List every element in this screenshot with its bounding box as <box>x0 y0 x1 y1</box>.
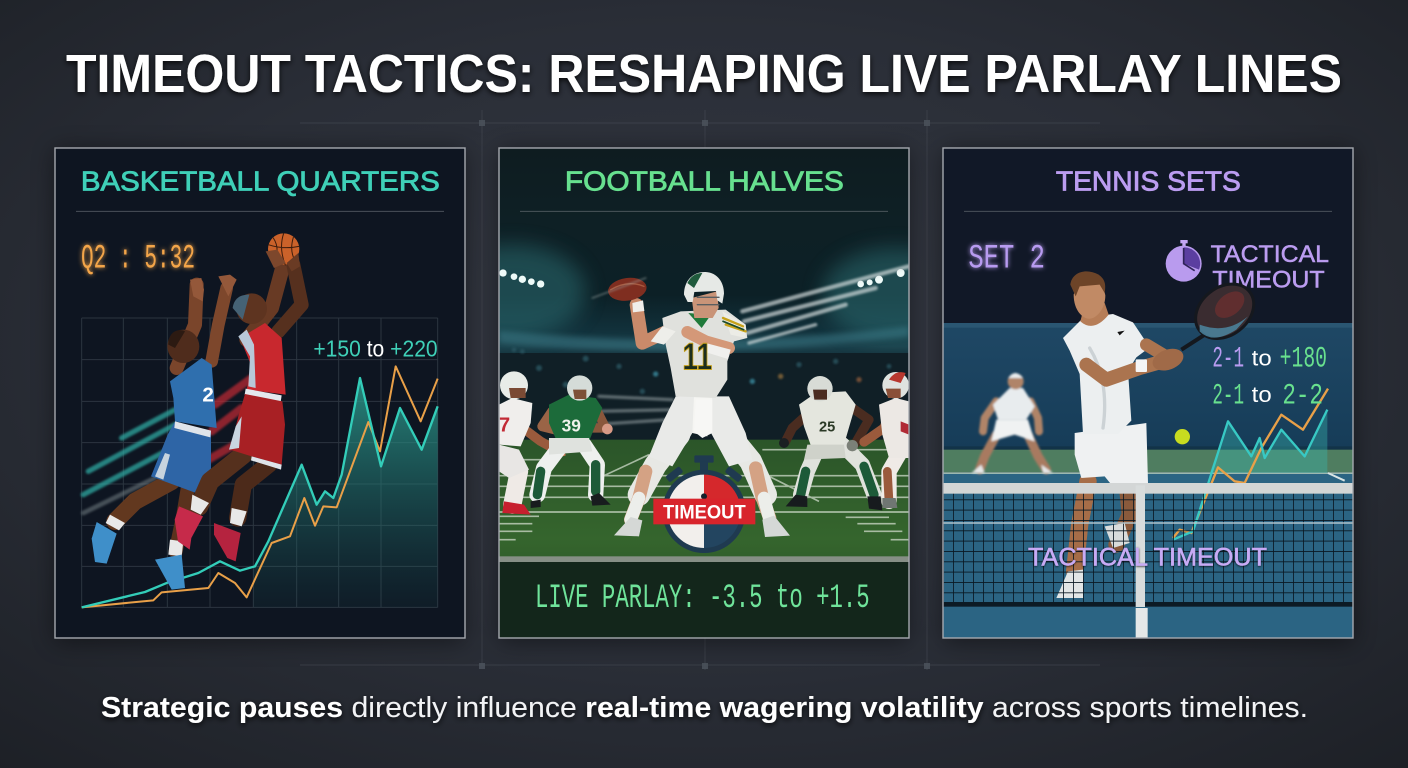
player: green jersey <box>531 375 613 508</box>
panel border: tennis <box>943 148 1353 638</box>
player: left lineman red trim <box>499 371 566 515</box>
player: left lineman red trim: 7 <box>499 414 510 436</box>
tennis net <box>943 483 1353 638</box>
panel border: football <box>499 148 909 638</box>
panel: football halves <box>499 148 908 638</box>
player: quarterback <box>592 272 790 537</box>
set score odds: to <box>1252 382 1272 407</box>
basketball player: red jersey <box>175 233 302 561</box>
main tennis player <box>1056 271 1186 598</box>
set score odds: 2-1 <box>1212 380 1244 414</box>
football field <box>499 440 909 638</box>
panel heading: basketball quarters: BASKETBALL QUARTERS <box>81 166 440 197</box>
player: far right red helmet <box>864 372 909 508</box>
tactical timeout callout <box>1211 241 1329 293</box>
tennis racket <box>1181 273 1264 350</box>
panel: tennis sets <box>944 148 1352 638</box>
set score odds: to <box>1252 345 1272 370</box>
line chart: set odds <box>1173 389 1328 540</box>
set score odds: 2-2 <box>1282 380 1323 414</box>
player: green jersey: 39 <box>562 415 581 435</box>
stadium lights and stands <box>439 245 969 445</box>
chart grid <box>82 318 438 607</box>
quarter clock: Q2 : 5:32 <box>81 239 195 278</box>
basketball player: blue jersey: 2 <box>202 383 214 406</box>
odds label: +150 to +220 <box>313 335 438 361</box>
basketball player: blue jersey <box>92 275 237 590</box>
set score odds: +180 <box>1280 343 1327 377</box>
tennis court background <box>943 323 1353 638</box>
set score odds <box>1212 343 1327 414</box>
footer caption: Strategic pauses directly influence real-time wagering volatility across sports timelines. <box>101 692 1308 724</box>
player: quarterback: 11 <box>682 336 712 379</box>
title: TIMEOUT TACTICS: RESHAPING LIVE PARLAY LINES <box>66 44 1342 104</box>
motion streaks <box>83 378 252 513</box>
tactical timeout callout: TACTICAL <box>1211 241 1329 268</box>
panel border: basketball <box>55 148 465 638</box>
icon: tactical stopwatch <box>1166 240 1202 282</box>
background tennis player <box>971 373 1053 473</box>
timeout banner: TIMEOUT <box>663 503 746 524</box>
player: right white jersey <box>779 376 882 510</box>
tennis ball <box>1175 429 1190 444</box>
tactical timeout callout: TIMEOUT <box>1212 266 1325 293</box>
player: right white jersey: 25 <box>819 419 835 435</box>
line chart: odds movement <box>82 366 438 607</box>
panel heading: tennis sets: TENNIS SETS <box>1056 166 1241 197</box>
tactical timeout caption: TACTICAL TIMEOUT <box>1028 544 1267 572</box>
icon: timeout stopwatch <box>653 455 755 553</box>
panel heading: football halves: FOOTBALL HALVES <box>565 166 844 197</box>
set score odds: 2-1 <box>1212 343 1244 377</box>
set label: SET 2 <box>968 239 1045 278</box>
panel: basketball quarters <box>56 148 464 638</box>
